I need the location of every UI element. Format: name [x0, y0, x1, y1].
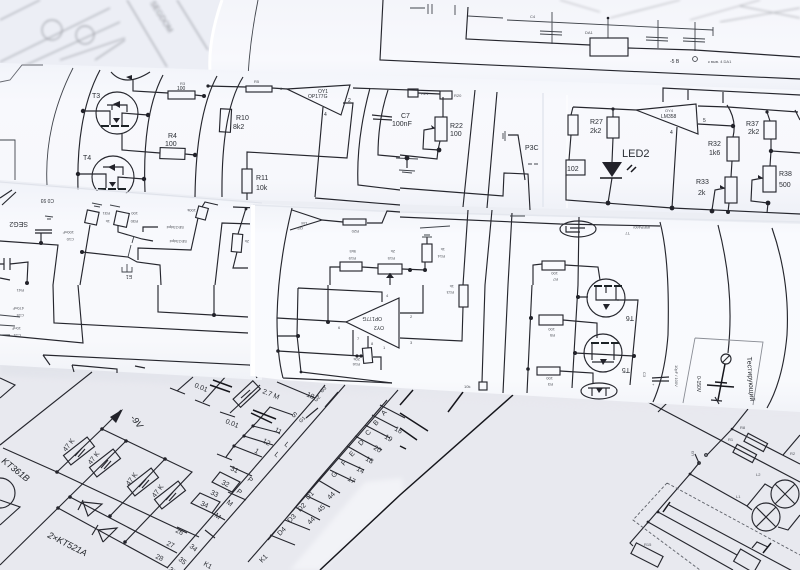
transistor T4	[78, 155, 144, 198]
resistor R5 lower: R5	[549, 333, 555, 338]
op amp OY1: OY1	[318, 89, 328, 95]
mirrored labels	[9, 197, 249, 338]
resistor R14: 1k	[441, 247, 445, 252]
resistor R4	[160, 133, 185, 159]
connector strip two: D2	[296, 502, 308, 513]
supply label: -9V	[128, 413, 146, 431]
top roll of schematic paper	[210, 0, 800, 100]
connector strip one: M	[225, 499, 234, 508]
resistor R5: R5	[254, 79, 260, 84]
resistor R19: R19	[348, 256, 356, 261]
op amp OY4: OY4	[665, 108, 674, 113]
resistor R10: 8k2	[233, 124, 244, 131]
resistor R33	[696, 177, 737, 203]
mirrored labels: 100	[131, 211, 138, 216]
component boxes of left roll	[85, 206, 243, 252]
connector strip one: P	[235, 488, 243, 497]
op amp OY2: 1	[383, 345, 386, 350]
resistor R4: R4	[168, 133, 177, 140]
connector strip one: 2.7 M	[261, 388, 280, 401]
transistor T3: T3	[92, 93, 100, 100]
resistor R19	[340, 249, 362, 271]
resistor R20	[343, 219, 366, 234]
wiring of left roll	[0, 190, 258, 378]
bottom right circuit: L2	[756, 472, 761, 477]
op amp OY4: 4	[670, 130, 673, 136]
resistor R15	[378, 249, 402, 278]
transistor T7 top: T7	[625, 231, 630, 236]
resistor R32: R32	[708, 141, 721, 148]
transistor label: KT361B	[0, 456, 32, 484]
connector strip one: 0.01	[193, 382, 209, 394]
connector strip two: C	[364, 429, 373, 437]
connector strip two: 16	[393, 426, 403, 436]
resistor R7: 100	[551, 271, 558, 276]
faded sheet behind top right corner	[560, 0, 800, 22]
capacitor C3: 10pF / 100V	[674, 365, 679, 387]
op amp OY2: 8	[371, 341, 374, 346]
transistor T5	[584, 334, 630, 373]
resistor R38	[763, 166, 792, 192]
resistor R20: R20	[351, 229, 359, 234]
test point dashed box: 0-150V	[695, 376, 701, 393]
resistor R10: R10	[236, 115, 249, 122]
resistor R5 lower	[539, 315, 563, 338]
connector strip one: 11	[273, 427, 283, 436]
connector strip one	[154, 371, 345, 570]
small part at fold: 10k	[464, 384, 470, 389]
connector strip two: D3	[286, 513, 298, 524]
transistor T7 top: IRFP460/	[632, 225, 650, 230]
right foreground roll	[250, 203, 800, 412]
op amp OY2: 2	[410, 314, 413, 319]
op amp OY4: LM358	[661, 114, 677, 120]
wiring of roll 2	[0, 68, 800, 214]
LED2 diode	[600, 148, 650, 178]
resistor R13: 1k	[450, 284, 454, 289]
connector strip one: G1	[298, 415, 307, 424]
mirrored labels: SEG2	[9, 220, 28, 227]
resistor R22: R22	[450, 123, 463, 130]
resistor R37: R37	[746, 121, 759, 128]
transistor T5: T5	[622, 366, 630, 373]
resistor R3 lower	[537, 367, 560, 387]
relay label: P3C	[525, 145, 539, 152]
connector strip one: 28	[154, 553, 164, 563]
mirrored labels: C0 93	[40, 197, 54, 203]
transistor T6: T6	[626, 314, 634, 321]
op amp OY4: 5	[703, 118, 706, 124]
DA1 block: DA1	[585, 30, 594, 35]
connector strip one: 0.01	[224, 418, 240, 430]
resistor R27: 2k2	[590, 128, 601, 135]
test point dashed box: Тестирующий	[745, 357, 756, 402]
twin diodes	[45, 500, 117, 558]
connector strip two: F	[340, 459, 348, 467]
transistor T6	[587, 279, 634, 321]
connector strip two: 45	[316, 504, 327, 514]
op amp OY2: 3	[410, 340, 413, 345]
connector strip one: M	[213, 512, 222, 521]
connector strip two: 19	[383, 434, 393, 444]
part 102	[566, 160, 585, 175]
mirrored labels: SEG3dpd	[167, 225, 184, 230]
left roll with mirrored schematic	[0, 182, 262, 380]
upper transistor fragment	[111, 72, 150, 80]
resistor R27	[590, 117, 619, 138]
connector strip two: A	[380, 409, 389, 417]
capacitor C7	[392, 113, 412, 128]
four 47K resistors: 47 K	[62, 437, 77, 453]
bottom right circuit: U3	[690, 450, 695, 456]
resistor R15: R15	[387, 256, 395, 261]
mirrored labels: R41	[16, 288, 24, 293]
op amp OY1	[280, 85, 351, 118]
small op amp fragment: OS	[297, 226, 303, 231]
mirrored labels: C14	[13, 333, 21, 338]
mirrored labels: SEG3dpd	[170, 239, 187, 244]
resistor R3	[168, 81, 195, 99]
resistor R22	[435, 117, 463, 141]
resistor R15: 2k	[391, 249, 395, 254]
connector strip one: 34	[188, 543, 198, 554]
lower flat sheet	[0, 355, 800, 570]
transistor T4: T4	[83, 155, 91, 162]
resistor R5 lower: 100	[548, 327, 555, 332]
small part at fold	[464, 382, 487, 390]
capacitor C3: C3	[642, 372, 647, 378]
connector strip two: 18	[364, 456, 374, 466]
resistor R11	[242, 169, 268, 193]
four 47K resistors: 47 K	[87, 450, 102, 466]
connector strip two: D1	[304, 490, 316, 501]
transistor fragment at fold	[581, 383, 617, 399]
connector strip one: L	[273, 451, 280, 459]
op amp OY1: OP177G	[308, 94, 328, 100]
mirrored labels: 10nF	[11, 326, 21, 331]
resistor R33: R33	[696, 179, 709, 186]
DA1 block	[585, 30, 628, 56]
bright overlapping paper patch	[290, 478, 404, 570]
small op amp fragment	[290, 210, 322, 231]
connector strip one: 18	[305, 391, 315, 401]
power supply note: -5 B	[670, 59, 680, 65]
connector strip two: 20	[372, 445, 382, 455]
mirrored labels: C15	[16, 313, 24, 318]
connector strip two	[248, 390, 405, 564]
resistor R13	[446, 284, 468, 307]
resistor R5	[246, 79, 272, 92]
top roll circuit wiring	[380, 0, 800, 79]
op amp OY2: 6	[338, 325, 341, 330]
op amp OY4	[636, 104, 706, 136]
capacitor C3	[642, 365, 679, 387]
mirrored labels: 2k	[245, 239, 249, 244]
connector strip one: 34	[199, 500, 209, 510]
background sheet, out of focus: SEGDOM	[148, 0, 175, 35]
mirrored labels: C10	[66, 237, 74, 242]
connector strip two: 44	[326, 491, 337, 501]
op amp OY2: 4	[386, 293, 389, 298]
resistor R19: 9k5	[349, 249, 356, 254]
mirrored labels: E1	[126, 273, 132, 279]
bottom right circuit: R1	[728, 437, 734, 442]
connector strip one: G3	[319, 385, 328, 394]
resistor R3: 100	[177, 86, 186, 92]
resistor R11: R11	[256, 175, 268, 182]
connector strip one: 27	[165, 540, 175, 550]
part 102: 102	[567, 166, 579, 173]
test point dashed box	[683, 338, 763, 405]
connector strip one: 1	[253, 448, 260, 456]
connector strip one: P	[246, 476, 254, 485]
op amp OY2: OP177G	[362, 315, 382, 321]
junction nodes	[76, 84, 773, 214]
resistor R3 lower: R3	[547, 382, 553, 387]
resistor R27: R27	[590, 119, 603, 126]
resistor R16: 20k	[354, 357, 360, 362]
resistor R10	[219, 109, 249, 132]
connector strip two: B	[372, 419, 381, 427]
capacitor C7: 100nF	[392, 121, 412, 128]
connector strip one: L	[283, 441, 290, 449]
small resistors at top	[408, 89, 462, 99]
connector strip one: S	[290, 411, 298, 420]
resistor R7: R7	[552, 277, 558, 282]
connector strip two: 17	[346, 476, 356, 486]
connector strip one: G2	[313, 394, 322, 403]
resistor unlabelled	[568, 115, 578, 135]
scattered nodes lower left	[55, 427, 167, 544]
small resistors at top: R20	[454, 93, 462, 98]
bottom right circuit: L1	[736, 494, 741, 499]
resistor R7	[542, 261, 565, 282]
connector strip one: 31	[229, 465, 239, 475]
resistor R32: 1k6	[709, 150, 720, 157]
roll 4 nodes	[276, 268, 636, 373]
connector strip one: 26	[174, 527, 184, 537]
resistor R37	[746, 121, 776, 139]
resistor R4: 100	[165, 141, 177, 148]
connector strip two: D4	[276, 526, 288, 537]
resistor R3: R3	[180, 81, 186, 86]
connector strip two: 44	[306, 516, 317, 526]
mirrored labels: R31	[102, 211, 110, 216]
resistor R16: R16	[352, 362, 360, 367]
mirrored labels: 100k	[187, 208, 196, 213]
connector strip one: 12	[261, 438, 271, 448]
connector strip two: E	[348, 450, 357, 458]
bottom right circuit: R15	[644, 542, 652, 547]
long diagonal traces	[320, 390, 513, 570]
four 47K resistors	[62, 437, 186, 509]
capacitor notes: C4	[530, 14, 536, 19]
resistor R14: R14	[437, 254, 445, 259]
resistor R14	[422, 235, 445, 262]
resistor R13: R13	[446, 290, 454, 295]
connector strip two: 14	[355, 466, 365, 476]
mirrored labels: 470nF	[12, 306, 24, 311]
reference note: к выв. 4 DA1	[708, 59, 732, 64]
mirrored labels: 100nF	[62, 230, 74, 235]
connector strip two: K1	[258, 553, 270, 564]
connector strip two: G	[330, 471, 339, 479]
resistor R33: 2k	[698, 190, 706, 197]
connector strip one: 35	[177, 556, 187, 567]
mirrored labels: 1k	[106, 219, 110, 224]
resistor R32	[708, 137, 739, 161]
transistor T7 top	[560, 221, 650, 237]
background sheet, out of focus	[0, 0, 800, 100]
op amp OY2	[338, 293, 413, 350]
resistor R3 lower: 100	[546, 376, 553, 381]
capacitor C7: C7	[401, 113, 410, 120]
op amp OY1: 4	[324, 112, 327, 118]
wiring of roll 4	[277, 208, 787, 408]
bottom right circuit	[630, 402, 800, 570]
resistor R37: 2k2	[748, 129, 759, 136]
small op amp fragment: LM	[301, 221, 307, 226]
resistor R16	[352, 348, 373, 367]
op amp OY1: 2	[348, 98, 351, 104]
roll 2 paper	[0, 63, 800, 216]
connector strip two: D	[357, 439, 366, 447]
left roll nodes	[25, 208, 247, 317]
bottom right circuit: R2	[790, 451, 796, 456]
bottom right circuit: R8	[740, 425, 746, 430]
op amp OY1: 6	[280, 86, 283, 91]
four 47K resistors: 47 K	[151, 483, 166, 499]
four 47K resistors: 47 K	[125, 471, 140, 487]
connector strip one: 33	[209, 489, 219, 499]
op amp OY2: OY2	[374, 324, 384, 330]
left circuit wiring	[0, 372, 192, 568]
transistor T3	[83, 92, 148, 134]
capacitor C3: +	[652, 382, 655, 387]
twin diodes: 2×KT521A	[45, 529, 89, 558]
small resistors at top: R21	[421, 91, 429, 96]
resistor R38: 500	[779, 182, 791, 189]
connector strip one: 32	[220, 479, 230, 489]
resistor R22: 100	[450, 131, 462, 138]
resistor R11: 10k	[256, 185, 268, 192]
mirrored labels: R30	[130, 219, 138, 224]
LED2 diode: LED2	[622, 148, 650, 160]
op amp OY2: 7	[357, 336, 360, 341]
resistor R38: R38	[779, 171, 792, 178]
